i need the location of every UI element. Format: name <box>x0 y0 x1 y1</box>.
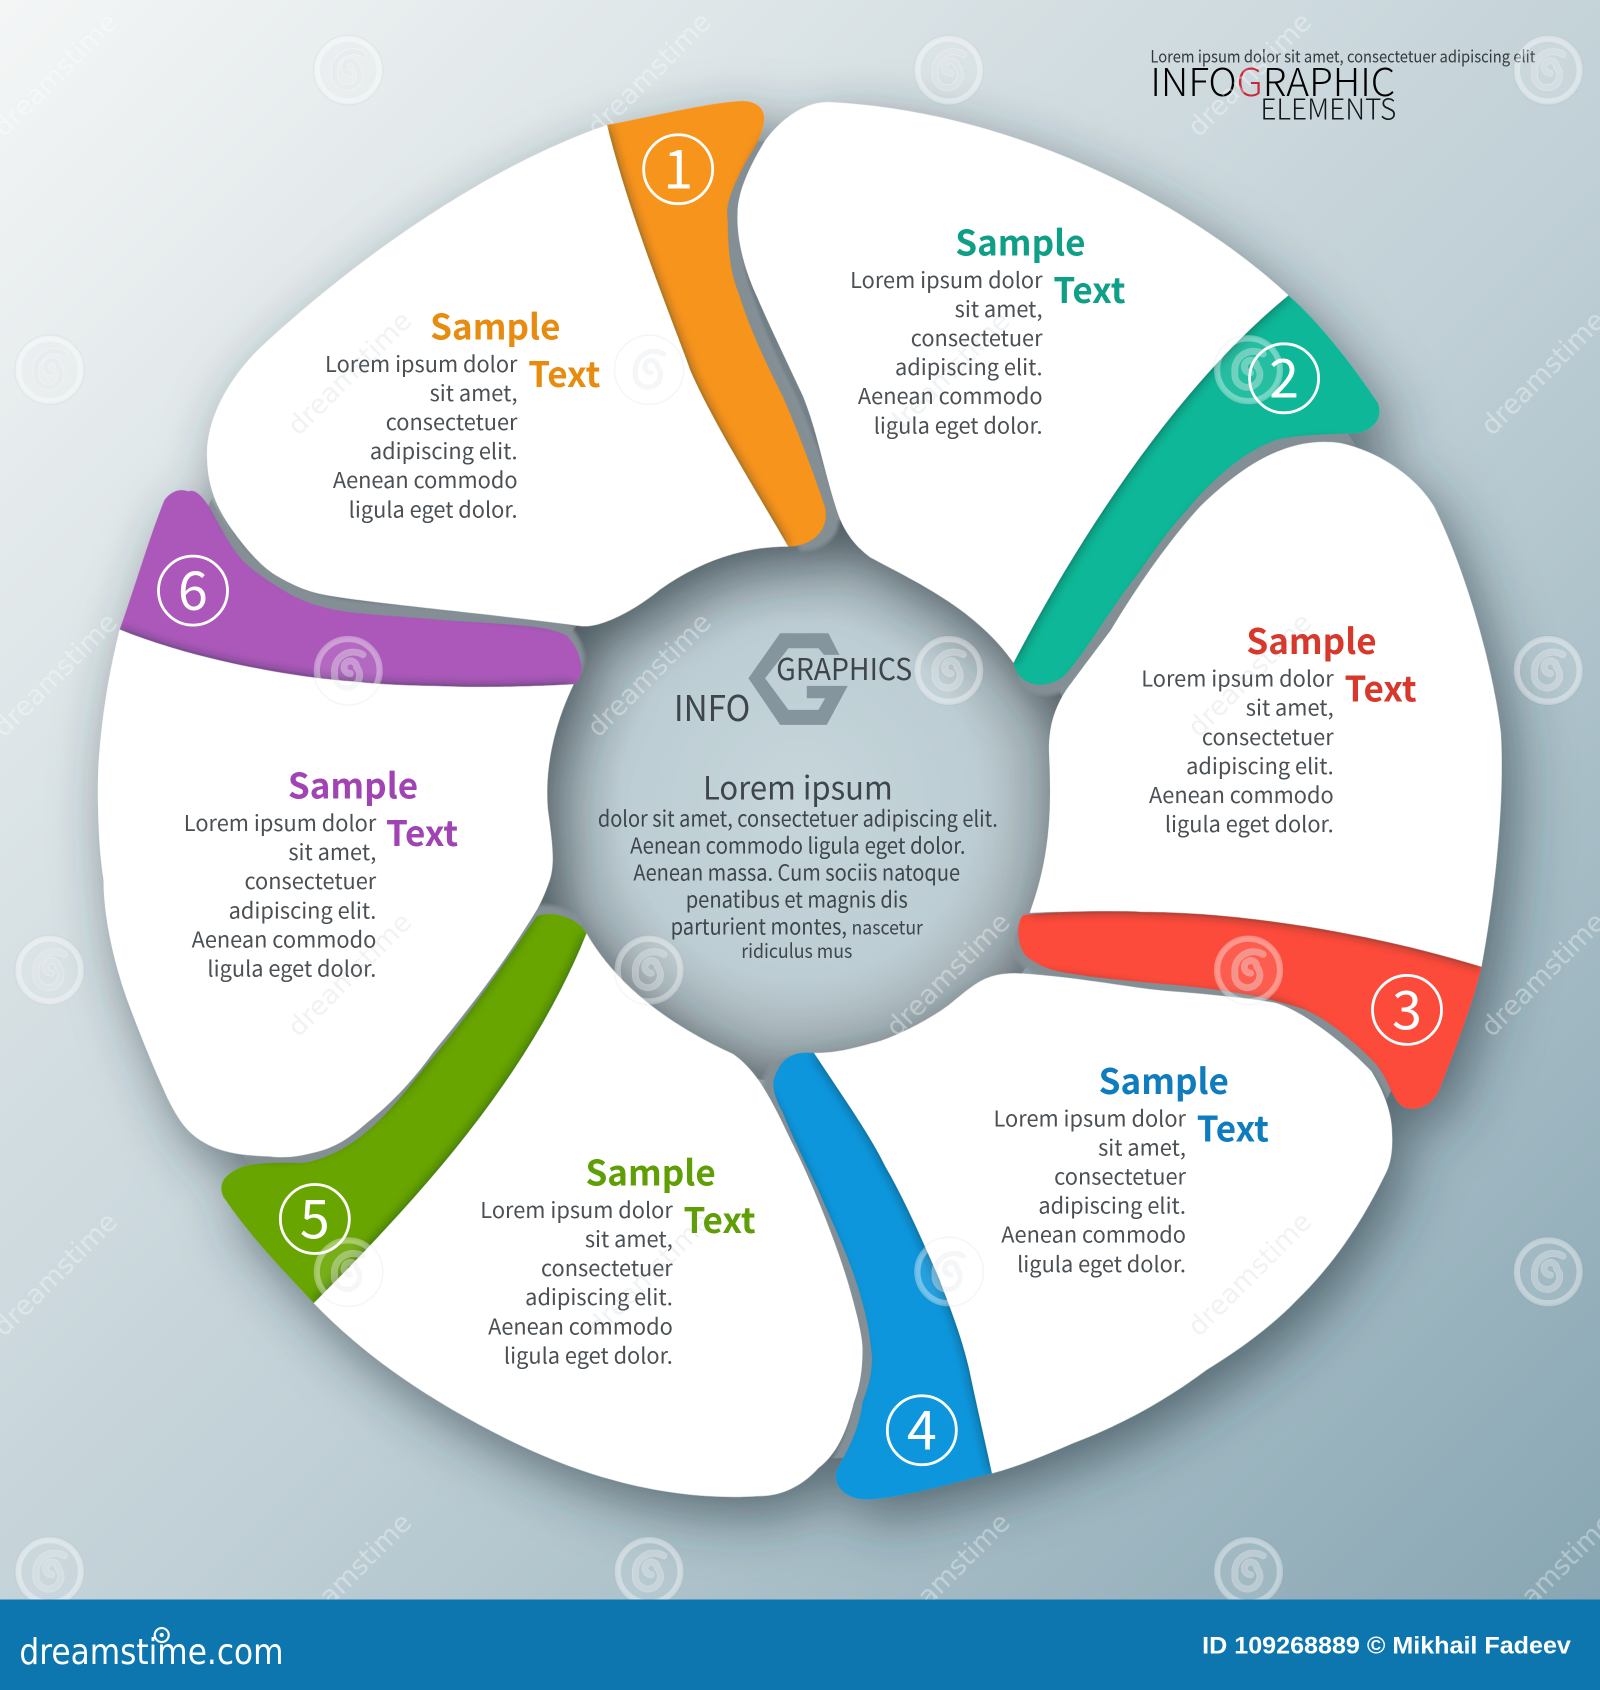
panel shape 1 <box>207 125 788 626</box>
centre text: dolor sit amet, consectetuer adipiscing elit. <box>598 802 998 834</box>
tab 5 green <box>221 914 587 1303</box>
text block: step 4: Lorem ipsum dolor <box>994 1102 1187 1133</box>
text block: step 4: consectetuer <box>1054 1161 1187 1192</box>
text block: step 4: Sample <box>1099 1054 1229 1105</box>
text block: step 5: Text <box>684 1193 756 1244</box>
number badge 2 <box>1250 335 1319 414</box>
text block: step 1: Aenean commodo <box>333 464 518 495</box>
text block: step 3: Text <box>1344 662 1417 713</box>
watermark text: dreamstime <box>880 305 1016 442</box>
text block: step 5 <box>480 1146 756 1370</box>
centre text: parturient montes, nascetur <box>671 909 923 941</box>
text block: step 1: ligula eget dolor. <box>349 493 518 524</box>
watermark text: dreamstime <box>282 1507 418 1643</box>
text block: step 1: Lorem ipsum dolor <box>325 348 518 379</box>
text block: step 4: adipiscing elit. <box>1038 1190 1186 1221</box>
text block: step 6: Aenean commodo <box>192 923 376 954</box>
text block: step 3: Lorem ipsum dolor <box>1141 663 1334 694</box>
number badge 6: 6 <box>178 547 208 626</box>
centre logo: hexagon G: GRAPHICS <box>776 645 912 689</box>
text block: step 5: Aenean commodo <box>488 1310 673 1341</box>
text block: step 1 <box>325 300 601 524</box>
text block: step 5: Lorem ipsum dolor <box>480 1194 673 1225</box>
watermark text: dreamstime <box>282 305 418 442</box>
text block: step 4 <box>994 1054 1269 1279</box>
text block: step 4: sit amet, <box>1098 1131 1186 1162</box>
number badge 6 <box>158 547 227 626</box>
text block: step 3: Sample <box>1246 614 1377 665</box>
text block: step 6: consectetuer <box>244 865 377 896</box>
number badge 2: 2 <box>1269 335 1299 414</box>
text block: step 4: ligula eget dolor. <box>1017 1248 1186 1279</box>
centre text: Aenean massa. Cum sociis natoque <box>633 856 960 888</box>
centre text: Aenean commodo ligula eget dolor. <box>630 829 965 861</box>
text block: step 6: Sample <box>288 759 418 810</box>
text block: step 2: sit amet, <box>955 293 1043 324</box>
text block: step 5: Sample <box>585 1146 716 1197</box>
panel shadows falling on the tabs <box>98 102 1502 1497</box>
number badge 3: 3 <box>1392 966 1422 1045</box>
centre text <box>598 763 998 964</box>
footer logo: dreamstime.com <box>19 1632 284 1673</box>
header title <box>1150 44 1536 129</box>
tab 6 purple <box>120 490 581 687</box>
gap shadows behind tabs <box>208 141 1396 1458</box>
text block: step 2: Lorem ipsum dolor <box>850 264 1043 295</box>
text block: step 6: adipiscing elit. <box>229 894 376 925</box>
number badge 4 <box>887 1387 956 1466</box>
watermark text: dreamstime <box>880 907 1016 1043</box>
watermark text: dreamstime <box>581 607 718 743</box>
text block: step 2: Text <box>1053 263 1126 314</box>
wheel of six segments <box>98 101 1502 1503</box>
text block: step 1: Sample <box>430 300 560 351</box>
panel shape 3 <box>1030 442 1502 967</box>
number badge 1: 1 <box>663 126 693 205</box>
text block: step 6: sit amet, <box>288 836 376 867</box>
text block: step 4: Text <box>1197 1101 1269 1152</box>
header title: INFOGRAPHIC <box>1150 53 1395 108</box>
text block: step 5: sit amet, <box>585 1223 673 1254</box>
text block: step 3 <box>1141 614 1417 839</box>
centre text: penatibus et magnis dis <box>686 883 908 915</box>
number badge 3 <box>1373 966 1442 1045</box>
panel shape 6 <box>98 629 574 1157</box>
text block: step 5: ligula eget dolor. <box>504 1339 673 1370</box>
text block: step 2: Aenean commodo <box>858 380 1043 411</box>
text block: step 5: consectetuer <box>541 1252 673 1283</box>
text block: step 2 <box>850 215 1126 440</box>
centre hub backdrop <box>516 517 1081 1082</box>
text block: step 2: adipiscing elit. <box>895 351 1043 382</box>
watermark text: dreamstime <box>880 1507 1016 1643</box>
text block: step 3: adipiscing elit. <box>1186 750 1334 781</box>
centre text: ridiculus mus <box>741 935 852 964</box>
text block: step 3: ligula eget dolor. <box>1165 808 1334 839</box>
watermark text: dreamstime <box>282 907 418 1043</box>
text block: step 6: Lorem ipsum dolor <box>184 807 377 838</box>
tab 4 blue <box>773 1053 992 1499</box>
number badge 5 <box>280 1175 349 1254</box>
watermark text: dreamstime <box>1182 607 1318 743</box>
text block: step 1: consectetuer <box>386 406 518 437</box>
watermark text: dreamstime <box>581 1206 718 1343</box>
text block: step 4: Aenean commodo <box>1001 1219 1186 1250</box>
text block: step 3: consectetuer <box>1202 721 1334 752</box>
text block: step 1: Text <box>528 347 601 398</box>
number badge 4: 4 <box>907 1387 937 1466</box>
tab 1 orange <box>607 101 826 546</box>
centre text: Lorem ipsum <box>703 763 893 810</box>
watermark text: dreamstime <box>1182 7 1318 143</box>
tab 2 teal <box>1013 295 1379 685</box>
centre logo: hexagon G: INFO <box>674 681 750 732</box>
text block: step 1: adipiscing elit. <box>370 435 518 466</box>
text block: step 3: sit amet, <box>1246 692 1334 723</box>
text block: step 5: adipiscing elit. <box>525 1281 673 1312</box>
footer band <box>0 1599 1600 1690</box>
text block: step 2: Sample <box>955 215 1086 266</box>
tab 3 red <box>1018 911 1481 1109</box>
footer credit: ID 109268889 © Mikhail Fadeev <box>1202 1633 1572 1659</box>
panel shape 4 <box>814 973 1392 1473</box>
text block: step 2: ligula eget dolor. <box>874 409 1043 440</box>
number badge 1 <box>644 126 713 205</box>
text block: step 6: Text <box>386 806 458 857</box>
text block: step 2: consectetuer <box>911 322 1043 353</box>
text block: step 6 <box>184 759 458 983</box>
panel shape 5 <box>314 933 863 1497</box>
panel shape 2 <box>737 102 1288 663</box>
watermark text: dreamstime <box>581 7 718 143</box>
centre logo: hexagon G <box>674 633 912 732</box>
text block: step 3: Aenean commodo <box>1149 779 1334 810</box>
header title: ELEMENTS <box>1260 87 1396 129</box>
watermark text: dreamstime <box>1182 1206 1318 1343</box>
text block: step 1: sit amet, <box>430 377 518 408</box>
text block: step 6: ligula eget dolor. <box>207 952 376 983</box>
number badge 5: 5 <box>300 1175 330 1254</box>
header title: Lorem ipsum dolor sit amet, consectetuer adipiscing elit <box>1150 44 1536 68</box>
